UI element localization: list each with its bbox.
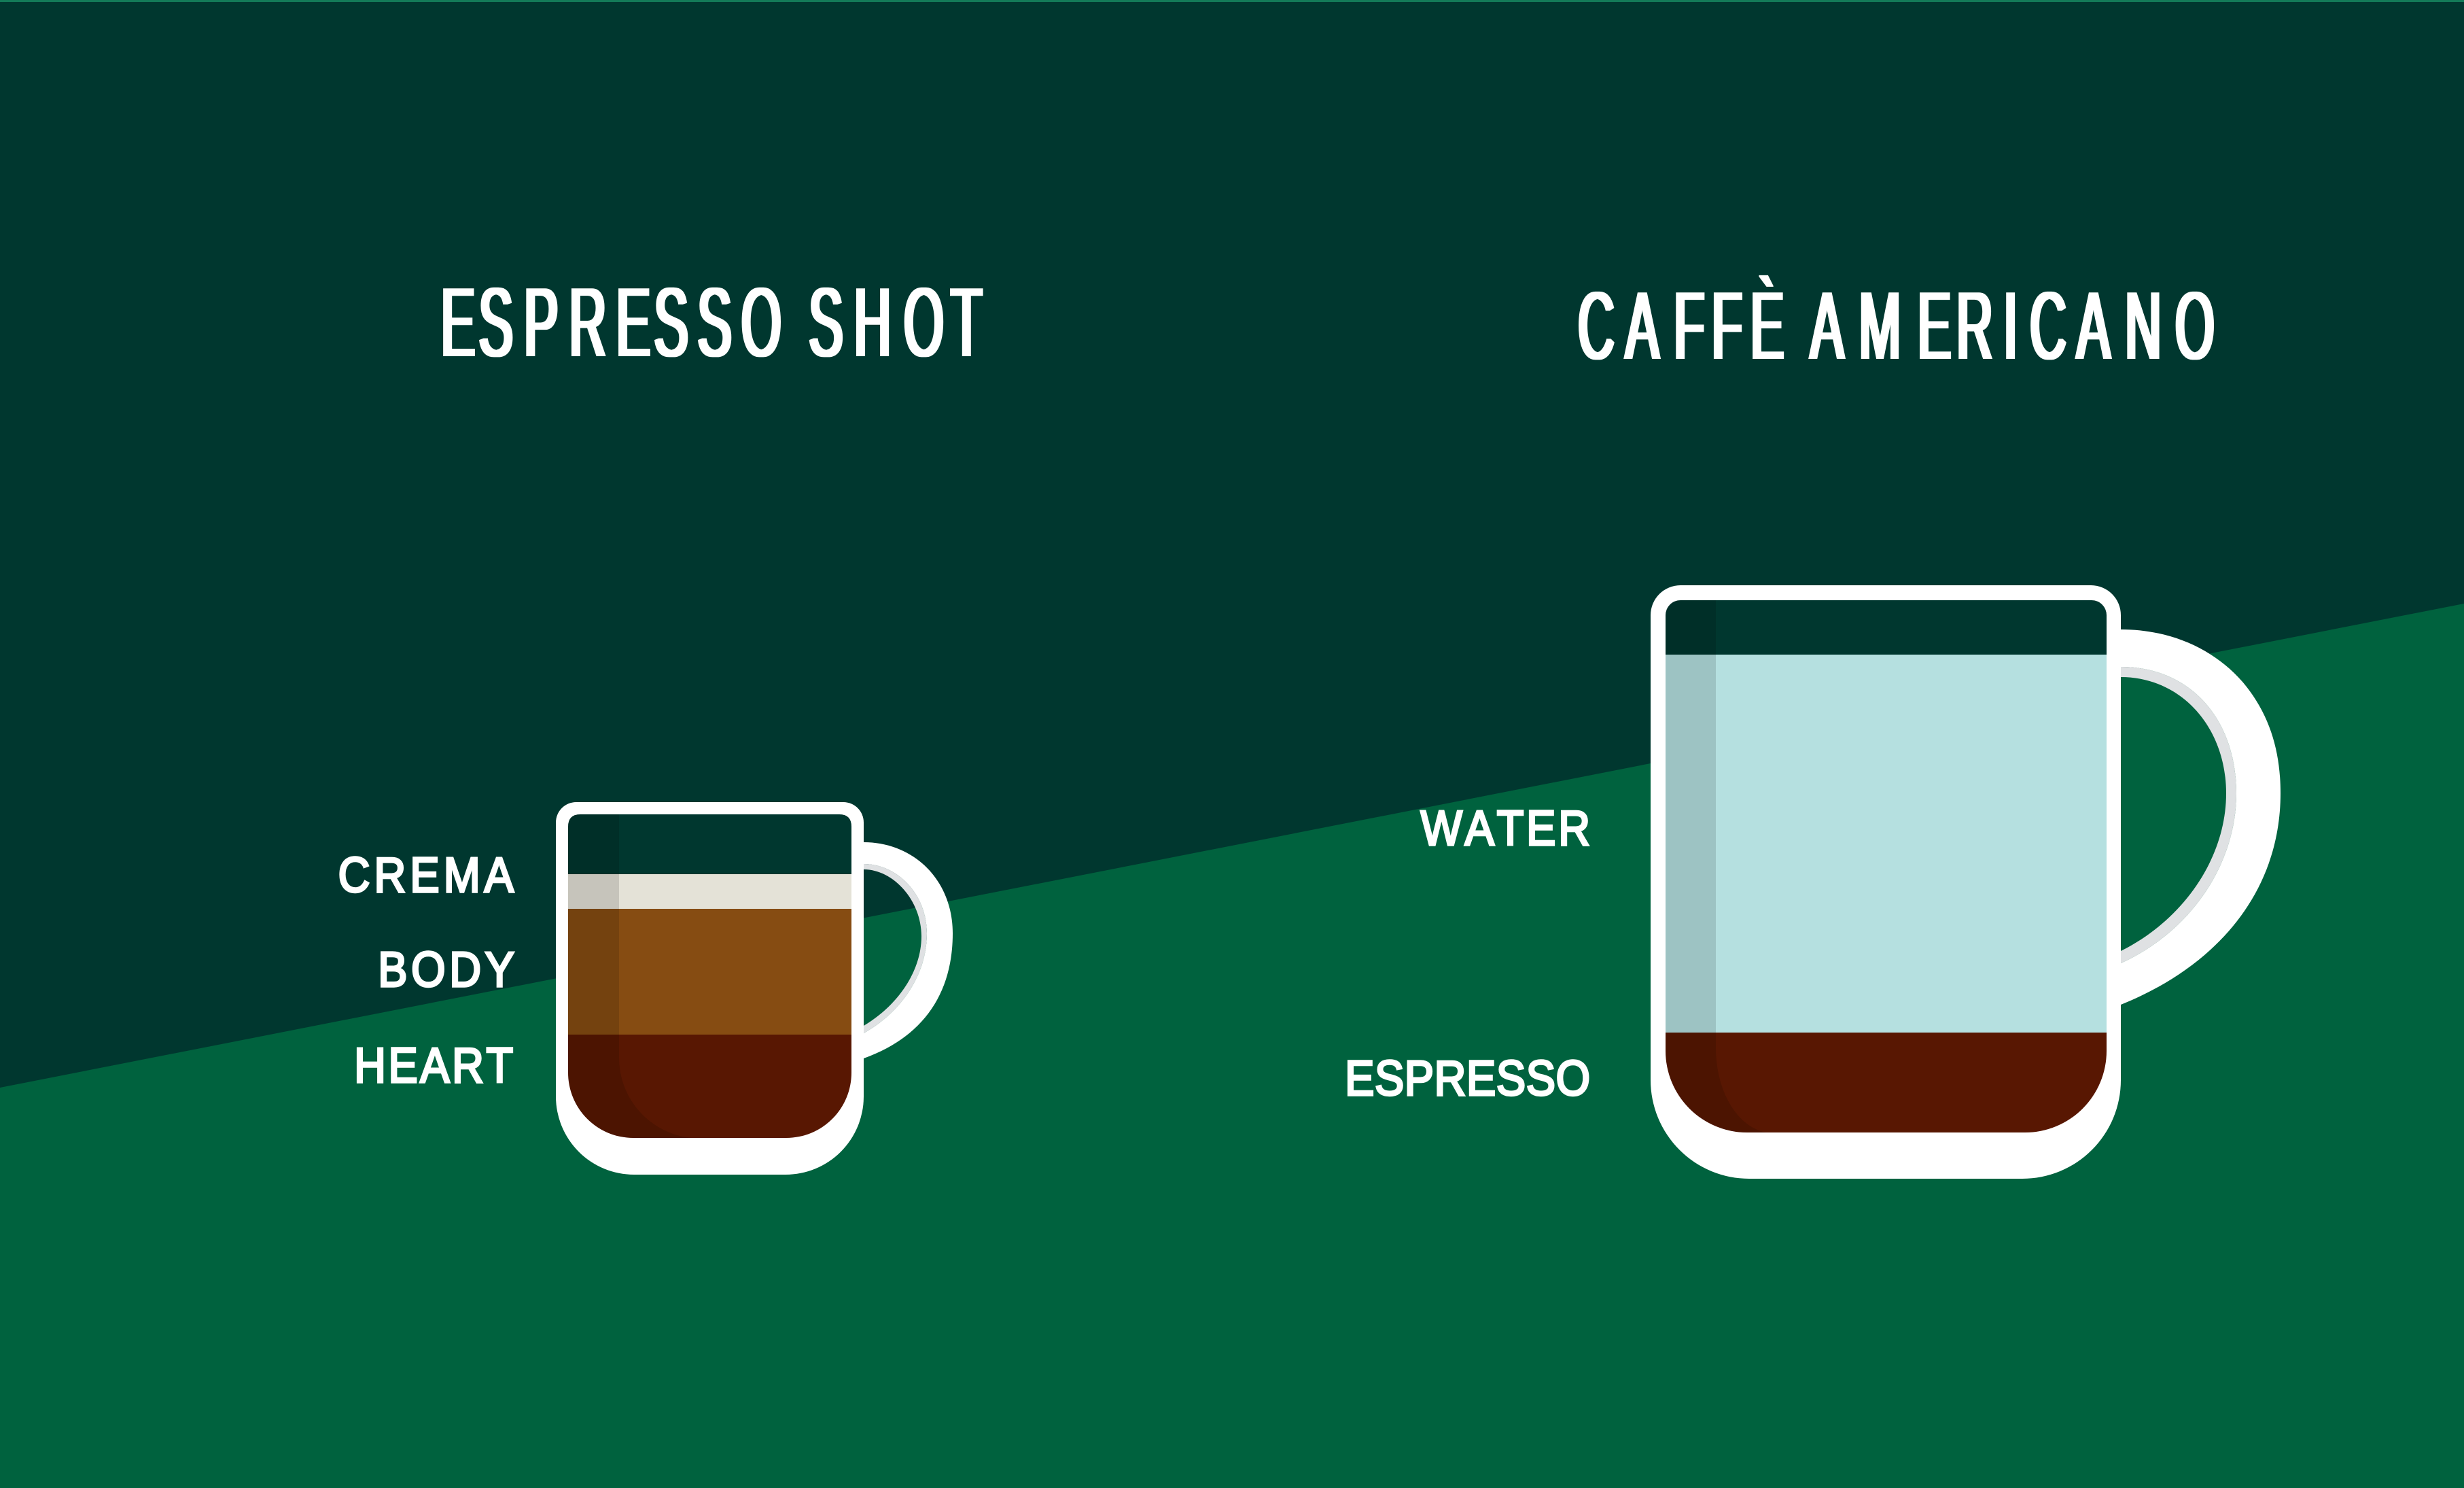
coffee layers: large mug <box>1661 595 2110 1138</box>
empty top of mug <box>1666 600 2107 655</box>
glass shading <box>1661 595 1767 1137</box>
espresso layer <box>1661 1033 2110 1138</box>
crema layer <box>564 874 856 909</box>
small espresso mug <box>556 802 953 1175</box>
heart layer <box>564 1035 856 1143</box>
large americano mug <box>1651 585 2281 1179</box>
mug handle: large <box>2117 629 2281 1005</box>
title: Espresso Shot: ESPRESSO SHOT <box>441 268 982 377</box>
label: water: WATER <box>1421 801 1590 856</box>
label: heart: HEART <box>354 1038 513 1093</box>
empty top of mug <box>568 814 851 874</box>
glass shading <box>564 809 691 1142</box>
body layer <box>564 909 856 1035</box>
label: body: BODY <box>378 942 514 997</box>
title: Caffè Americano: CAFFÈ AMERICANO <box>1578 272 2215 379</box>
coffee layers: small mug <box>564 809 856 1143</box>
water layer <box>1661 655 2110 1033</box>
mug body: large <box>1651 585 2121 1179</box>
mug body: small <box>556 802 864 1175</box>
label: crema: CREMA <box>338 848 514 903</box>
mug handle: small <box>860 842 953 1058</box>
label: espresso: ESPRESSO <box>1345 1051 1590 1106</box>
